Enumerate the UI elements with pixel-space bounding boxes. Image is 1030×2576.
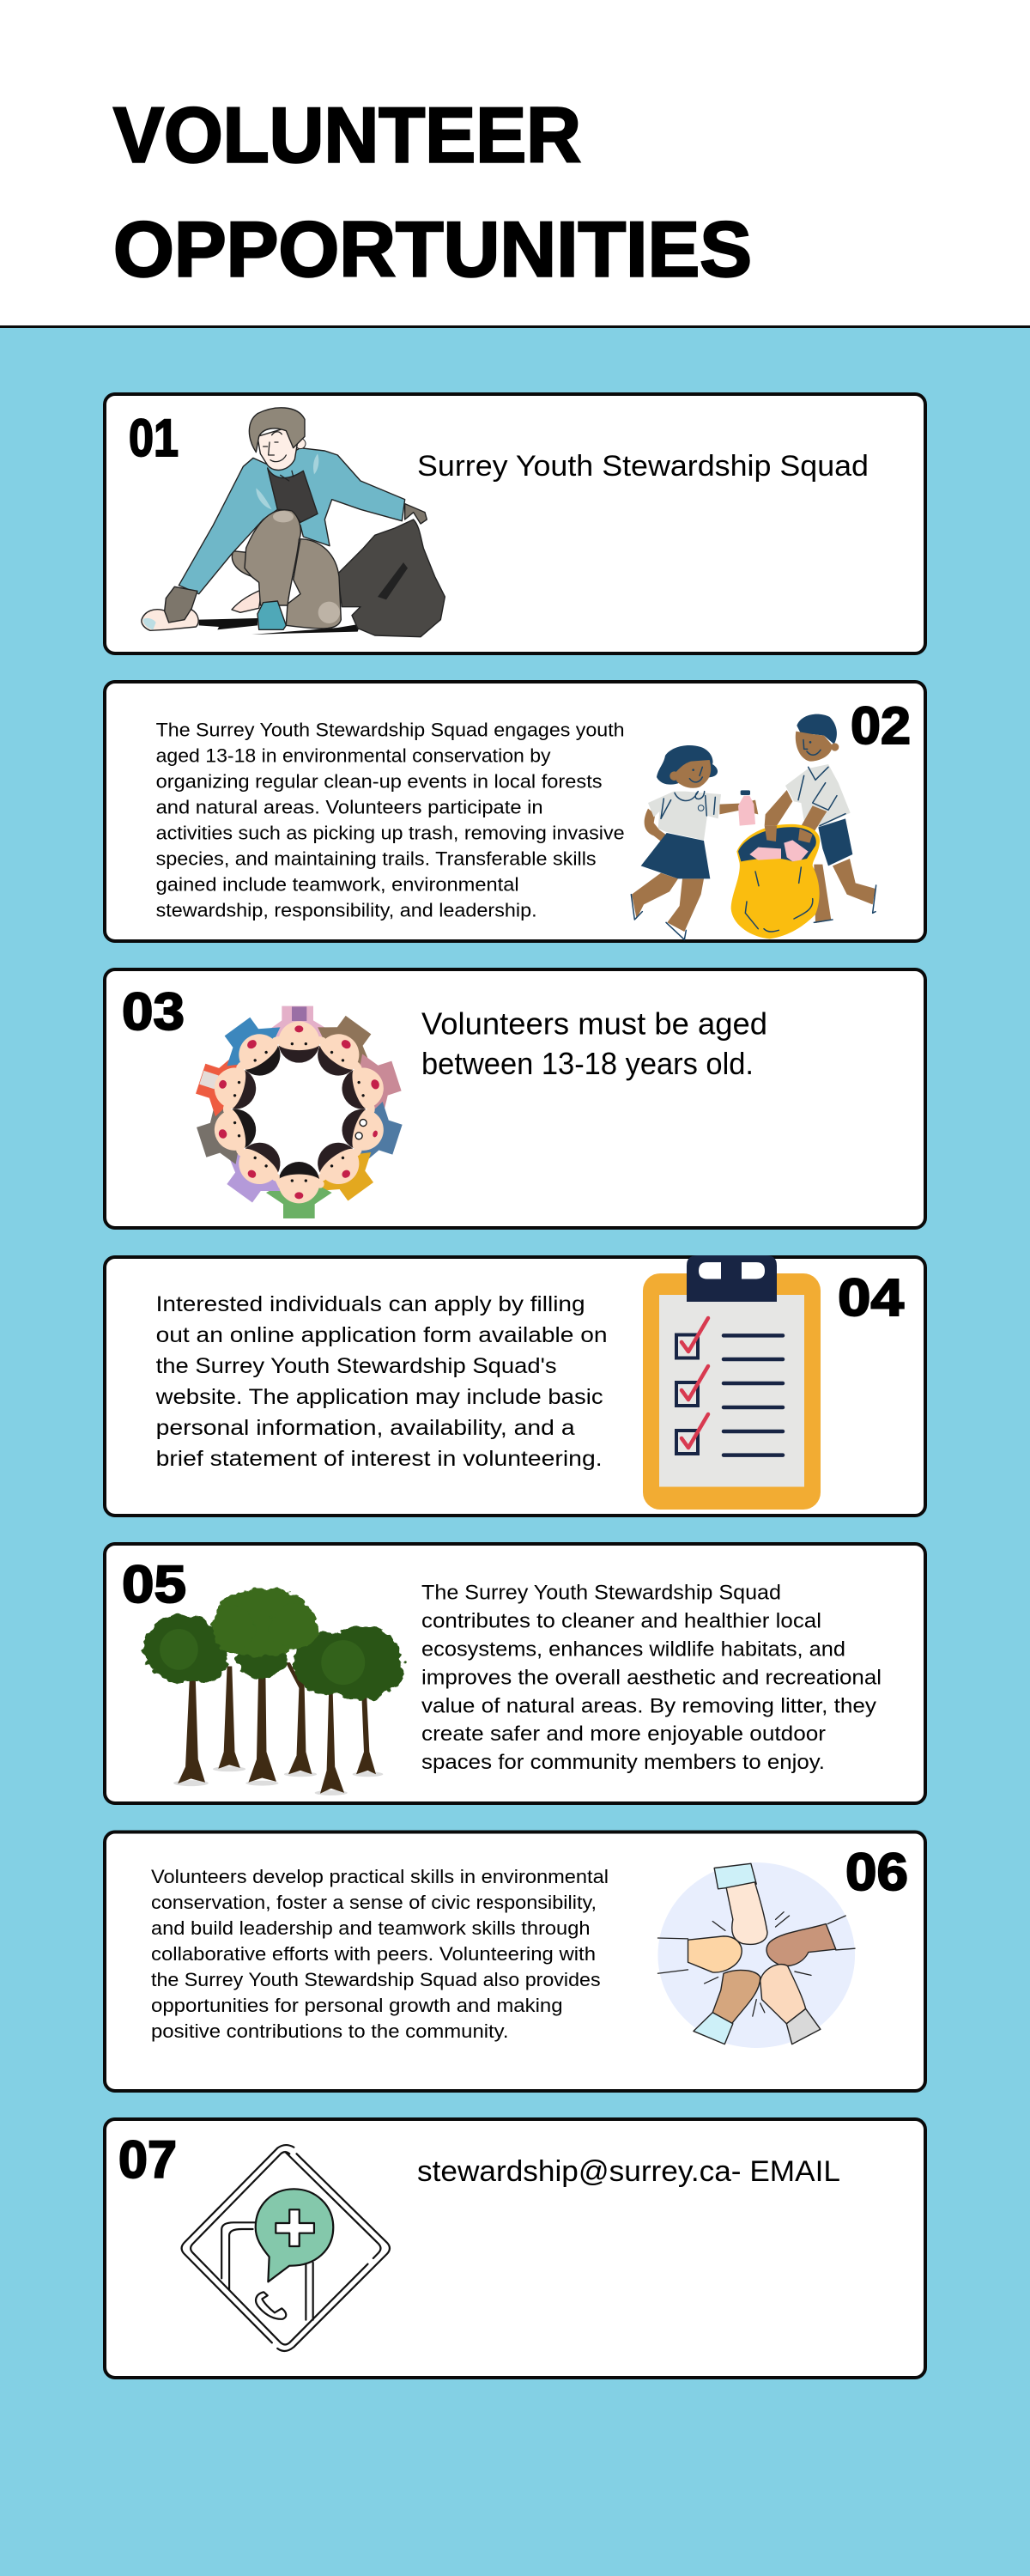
panel: 04 how to apply bbox=[105, 1255, 925, 1516]
text block: volunteer benefits: opportunities for personal growth and making bbox=[151, 1995, 563, 2016]
panel: 07 contact bbox=[105, 2119, 925, 2378]
title: OPPORTUNITIES bbox=[113, 206, 752, 294]
text block: age requirement: between 13-18 years old. bbox=[421, 1046, 754, 1081]
text block: volunteer benefits: positive contributions to the community. bbox=[151, 2020, 508, 2042]
icon: circle of people seen from above bbox=[191, 1006, 407, 1218]
text: contact email: stewardship@surrey.ca- EMAIL bbox=[417, 2155, 840, 2188]
text block: program description: stewardship, responsibility, and leadership. bbox=[156, 900, 537, 921]
text block: community impact: value of natural areas. By removing litter, they bbox=[421, 1694, 876, 1717]
text block: community impact: The Surrey Youth Stewardship Squad bbox=[421, 1581, 781, 1604]
text block: program description: and natural areas. Volunteers participate in bbox=[156, 797, 543, 818]
text block: volunteer benefits: the Surrey Youth Stewardship Squad also provides bbox=[151, 1969, 601, 1990]
text block: program description: species, and maintaining trails. Transferable skills bbox=[156, 848, 597, 870]
text block: community impact bbox=[421, 1581, 882, 1774]
text block: volunteer benefits: Volunteers develop practical skills in environmental bbox=[151, 1866, 609, 1887]
panel: 01 program name bbox=[105, 394, 925, 653]
text block: program description: The Surrey Youth Stewardship Squad engages youth bbox=[156, 720, 625, 741]
text block: how to apply: brief statement of interest in volunteering. bbox=[156, 1447, 603, 1471]
heading: Surrey Youth Stewardship Squad: Surrey Youth Stewardship Squad bbox=[417, 450, 869, 483]
text block: age requirement: Volunteers must be aged bbox=[421, 1006, 767, 1041]
text block: how to apply: out an online application form available on bbox=[156, 1323, 608, 1347]
text block: community impact: spaces for community members to enjoy. bbox=[421, 1751, 825, 1774]
text block: how to apply bbox=[154, 1292, 608, 1471]
text block: program description: organizing regular clean-up events in local forests bbox=[156, 771, 603, 793]
text block: how to apply: website. The application may include basic bbox=[154, 1385, 603, 1409]
number 06: 06 bbox=[845, 1843, 908, 1901]
panel: 02 program description bbox=[105, 682, 925, 941]
text block: how to apply: the Surrey Youth Stewardship Squad's bbox=[156, 1354, 557, 1378]
text block: how to apply: personal information, availability, and a bbox=[156, 1416, 575, 1440]
title bbox=[113, 93, 752, 294]
number 02: 02 bbox=[851, 696, 911, 755]
text block: community impact: improves the overall aesthetic and recreational bbox=[421, 1666, 882, 1689]
text block: volunteer benefits: and build leadership and teamwork skills through bbox=[151, 1917, 591, 1939]
number 05: 05 bbox=[122, 1555, 186, 1613]
icon: circle of fist bumps bbox=[657, 1862, 855, 2048]
text block: program description: aged 13-18 in environmental conservation by bbox=[156, 745, 551, 767]
number 01: 01 bbox=[129, 409, 179, 467]
panel: 06 volunteer benefits bbox=[105, 1832, 925, 2091]
number 04: 04 bbox=[838, 1268, 904, 1327]
icon: group of trees bbox=[144, 1588, 403, 1795]
text block: volunteer benefits: conservation, foster a sense of civic responsibility, bbox=[151, 1892, 597, 1913]
text block: age requirement bbox=[421, 1006, 767, 1081]
text block: program description bbox=[156, 720, 625, 921]
text block: volunteer benefits bbox=[151, 1866, 609, 2042]
number 07: 07 bbox=[118, 2130, 177, 2189]
panel: 05 community impact bbox=[105, 1544, 925, 1803]
icon: two children collecting bottles in a yellow bag bbox=[631, 714, 876, 939]
text block: volunteer benefits: collaborative efforts with peers. Volunteering with bbox=[151, 1943, 596, 1965]
text block: community impact: ecosystems, enhances wildlife habitats, and bbox=[421, 1637, 845, 1661]
text block: community impact: create safer and more enjoyable outdoor bbox=[421, 1722, 826, 1746]
text block: program description: activities such as picking up trash, removing invasive bbox=[156, 823, 625, 844]
text block: community impact: contributes to cleaner and healthier local bbox=[421, 1609, 821, 1632]
panel: 03 age requirement bbox=[105, 969, 925, 1228]
icon: volunteer picking up litter with a trash bag bbox=[142, 408, 445, 637]
text block: program description: gained include teamwork, environmental bbox=[156, 874, 519, 896]
number 03: 03 bbox=[122, 982, 185, 1041]
icon: clipboard checklist bbox=[643, 1255, 821, 1510]
icon: phone with medical chat bubble in a diamond bbox=[182, 2145, 390, 2351]
title: VOLUNTEER bbox=[113, 93, 581, 179]
text block: how to apply: Interested individuals can apply by filling bbox=[156, 1292, 585, 1316]
